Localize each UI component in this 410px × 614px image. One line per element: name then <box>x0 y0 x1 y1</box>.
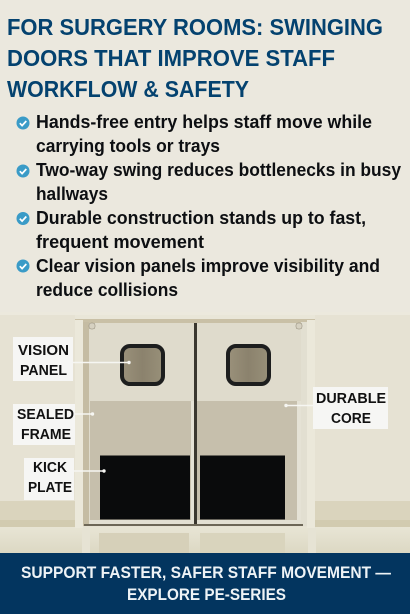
label: kick plate: PLATE <box>28 480 72 496</box>
bullet: clear vision panels: Clear vision panels improve visibility and <box>36 256 380 276</box>
right door leaf <box>197 323 301 524</box>
bullet: hands-free entry: carrying tools or trays <box>36 136 220 156</box>
bullet: durable construction: frequent movement <box>36 232 204 252</box>
bullet: durable construction: Durable construction stands up to fast, <box>36 208 366 228</box>
label: vision panel <box>13 337 131 381</box>
benefits list <box>16 112 401 300</box>
bullet: clear vision panels: reduce collisions <box>36 280 178 300</box>
baseboards <box>0 501 75 521</box>
door scene photo <box>0 312 410 553</box>
door frame <box>75 315 315 319</box>
label: sealed frame <box>13 404 94 445</box>
label: vision panel: VISION <box>18 343 69 359</box>
bullet: hands-free entry: Hands-free entry helps staff move while <box>36 112 372 132</box>
bullet: two-way swing <box>16 160 401 204</box>
bullet: durable construction <box>16 208 366 252</box>
label: durable core: CORE <box>331 411 371 427</box>
floor <box>0 527 410 553</box>
left door leaf <box>89 323 194 524</box>
title: FOR SURGERY ROOMS: SWINGING <box>7 14 383 40</box>
door hinges <box>89 323 302 329</box>
left vision window <box>122 346 163 384</box>
label: sealed frame: FRAME <box>21 427 71 443</box>
title: WORKFLOW & SAFETY <box>7 76 249 102</box>
label: kick plate <box>24 458 106 500</box>
label: vision panel: PANEL <box>20 363 67 379</box>
footer call to action banner: SUPPORT FASTER, SAFER STAFF MOVEMENT — <box>21 564 391 582</box>
footer call to action banner: EXPLORE PE-SERIES <box>127 586 286 604</box>
bullet: clear vision panels <box>16 256 380 300</box>
right kick plate <box>200 456 285 520</box>
label: durable core: DURABLE <box>316 391 386 407</box>
footer call to action banner <box>0 553 410 614</box>
title: DOORS THAT IMPROVE STAFF <box>7 45 335 71</box>
center door gap <box>194 323 197 524</box>
label: kick plate: KICK <box>33 460 67 476</box>
bullet: two-way swing: hallways <box>36 184 108 204</box>
right vision window <box>228 346 269 384</box>
bullet: two-way swing: Two-way swing reduces bottlenecks in busy <box>36 160 401 180</box>
wall <box>0 312 410 528</box>
label: sealed frame: SEALED <box>17 407 74 423</box>
title <box>7 14 383 102</box>
bullet: hands-free entry <box>16 112 372 156</box>
left kick plate <box>100 456 190 520</box>
label: durable core <box>284 387 388 429</box>
